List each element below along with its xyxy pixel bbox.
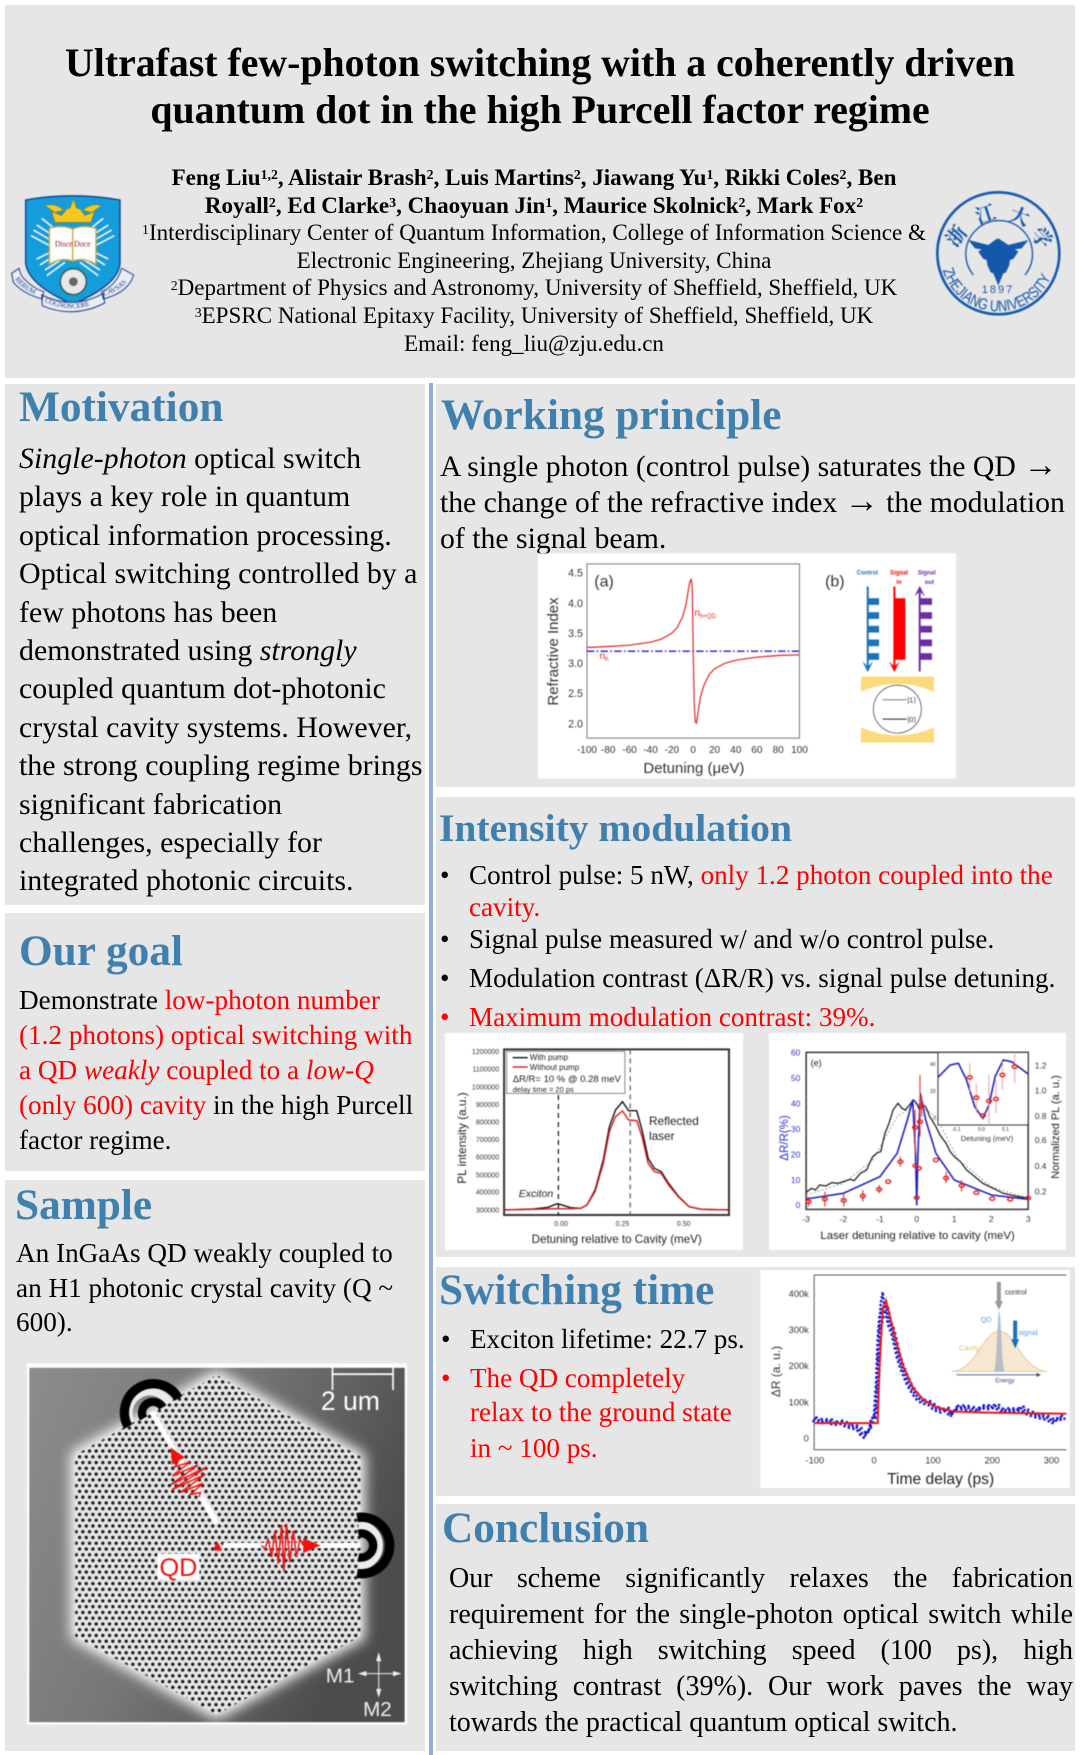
chart: switching time decay: 0: [871, 1455, 877, 1465]
icon: Zhejiang University seal: 1897: [982, 284, 1014, 296]
QD label: QD: [159, 1554, 197, 1582]
goal text: factor regime.: [19, 1125, 171, 1155]
axis labels: [568, 568, 583, 730]
panel: our goal: [5, 913, 425, 1171]
chart: PL intensity vs detuning: Detuning relative to Cavity (meV): [532, 1233, 702, 1246]
tick labels: 0: [804, 1433, 809, 1443]
inset: energy diagram: [952, 1282, 1047, 1384]
scheme: cavity with two-level system: |0⟩: [907, 715, 916, 724]
chart: switching time decay: 300: [1044, 1455, 1059, 1465]
chart: switching time decay: 100: [925, 1455, 941, 1465]
authors and affiliations: 3EPSRC National Epitaxy Facility, University of Sheffield, Sheffield, UK: [195, 302, 873, 328]
motivation text: few photons has been: [19, 596, 277, 629]
y tick labels: 600000: [476, 1155, 499, 1162]
y tick labels: 1100000: [472, 1067, 499, 1074]
conclusion text: [449, 1563, 1073, 1738]
chart: refractive index and scheme: 60: [751, 745, 763, 756]
left axis ticks: 50: [791, 1073, 801, 1083]
inset: energy diagram: control: [1005, 1287, 1027, 1296]
motivation text: significant fabrication: [19, 788, 282, 821]
QD marker: [213, 1542, 222, 1550]
y tick labels: 1000000: [472, 1084, 499, 1091]
chart: modulation contrast vs laser detuning: 0.0: [978, 1127, 985, 1133]
icon: Zhejiang University seal: 大: [1006, 198, 1034, 232]
vertical divider: [429, 383, 433, 1755]
heading: switching time: Switching time: [439, 1266, 714, 1314]
authors and affiliations: Feng Liu1,2, Alistair Brash2, Luis Martins2, Jiawang Yu1, Rikki Coles2, Ben: [172, 164, 896, 190]
chart: modulation contrast vs laser detuning: 20: [930, 1089, 936, 1095]
motivation text: Optical switching controlled by a: [19, 557, 417, 590]
x ticks: 0: [914, 1214, 919, 1224]
inset: energy diagram: signal: [1019, 1328, 1038, 1337]
authors and affiliations: Electronic Engineering, Zhejiang University, China: [297, 247, 771, 273]
motivation text: challenges, especially for: [19, 826, 322, 859]
title: [65, 41, 1015, 132]
x ticks: -2: [840, 1214, 847, 1224]
icon: Zhejiang University seal: 学: [1025, 220, 1061, 254]
switching bullets: relax to the ground state: [470, 1397, 732, 1427]
motivation text: Single-photon optical switch: [19, 442, 361, 475]
sample text: 600).: [16, 1307, 73, 1337]
scheme: signal out arrow: out: [925, 580, 934, 586]
chart: refractive index and scheme: (a): [594, 574, 614, 591]
chart: refractive index and scheme: h: [605, 657, 609, 663]
chart: PL intensity vs detuning: Without pump: [530, 1063, 580, 1072]
chart: refractive index and scheme: 0: [690, 745, 696, 756]
scheme: control arrow: [857, 571, 879, 672]
left axis ticks: [791, 1048, 801, 1210]
sample text: [16, 1238, 393, 1337]
authors and affiliations: [142, 164, 926, 356]
crystal hexagon: [75, 1375, 360, 1715]
heading: conclusion: Conclusion: [442, 1504, 649, 1552]
inset: energy diagram: Energy: [995, 1378, 1014, 1384]
y tick labels: 300000: [476, 1207, 499, 1214]
motivation text: crystal cavity systems. However,: [19, 711, 412, 744]
chart: modulation contrast vs laser detuning: Normalized PL (a. u.): [1050, 1075, 1062, 1179]
chart: switching time decay: ΔR (a. u.): [769, 1346, 783, 1397]
y tick labels: 900000: [476, 1102, 499, 1109]
panel: switching time: •: [441, 1363, 450, 1393]
chart: refractive index and scheme: Detuning (μeV): [643, 760, 744, 777]
goal text: (1.2 photons) optical switching with: [19, 1020, 412, 1050]
heading: working principle: Working principle: [441, 391, 781, 439]
data points: [813, 1292, 1066, 1438]
chart: modulation contrast vs laser detuning: (e): [811, 1058, 822, 1068]
chart: modulation contrast vs laser detuning: -0.1: [952, 1127, 961, 1133]
left axis ticks: 20: [791, 1150, 801, 1160]
waveguides: [152, 1412, 360, 1545]
left axis ticks: 60: [791, 1048, 801, 1058]
authors and affiliations: Royall2, Ed Clarke3, Chaoyuan Jin1, Maurice Skolnick2, Mark Fox2: [205, 192, 863, 218]
switching bullets: [441, 1324, 745, 1463]
chart: PL intensity vs detuning: laser: [649, 1129, 675, 1143]
goal text: Demonstrate low-photon number: [19, 985, 380, 1015]
x tick labels: 0.50: [677, 1221, 691, 1228]
x tick labels: 0.25: [616, 1221, 629, 1228]
inset labels: Detuning (meV): [961, 1134, 1014, 1143]
working principle text: the change of the refractive index → the modulation: [440, 483, 1065, 520]
chart: PL intensity vs detuning: ΔR/R= 10 % @ 0.28 meV: [513, 1074, 621, 1085]
left axis ticks: 10: [791, 1175, 801, 1185]
y tick labels: 800000: [476, 1119, 499, 1126]
annotations: Reflected: [649, 1114, 699, 1128]
switching bullets: Exciton lifetime: 22.7 ps.: [470, 1324, 745, 1354]
panel: switching time: •: [441, 1324, 450, 1354]
heading: sample: Sample: [15, 1181, 152, 1229]
x ticks: 1: [952, 1214, 957, 1224]
axis labels: 4.5: [568, 568, 583, 580]
x ticks: -3: [802, 1214, 810, 1224]
axis labels: 4.0: [568, 598, 583, 610]
chart: modulation contrast vs laser detuning: 0: [933, 1116, 936, 1122]
panel: intensity modulation: •: [440, 924, 450, 954]
grating couplers: [124, 1384, 390, 1574]
chart: refractive index and scheme: -60: [622, 745, 637, 756]
bullet list: Control pulse: 5 nW, only 1.2 photon coupled into the: [469, 860, 1053, 890]
panel: header: [5, 5, 1075, 378]
right axis ticks: 1.0: [1035, 1086, 1047, 1096]
icon: Zhejiang University seal: ZHEJIANG UNIVERSITY: [942, 266, 1050, 312]
right axis ticks: [1035, 1061, 1047, 1197]
icon: Zhejiang University seal: 浙: [937, 218, 973, 252]
chart: refractive index and scheme: -20: [665, 745, 680, 756]
goal text: (only 600) cavity in the high Purcell: [19, 1090, 413, 1120]
left axis ticks: 30: [791, 1124, 801, 1134]
panel: working principle: [436, 384, 1075, 787]
scale bar: 2 um: [321, 1386, 380, 1416]
sample micrograph: [27, 1363, 407, 1725]
panel: intensity modulation: •: [440, 1002, 450, 1032]
motivation text: demonstrated using strongly: [19, 634, 357, 667]
axis labels: 3.5: [568, 628, 583, 640]
motivation text: coupled quantum dot-photonic: [19, 672, 386, 705]
icon: Zhejiang University seal: [935, 190, 1062, 316]
x tick labels: 0.00: [554, 1221, 568, 1228]
plot frame: [814, 1275, 1066, 1450]
left axis ticks: 40: [791, 1098, 801, 1108]
goal text: [19, 985, 413, 1155]
chart: refractive index and scheme: Refractive Index: [545, 597, 562, 706]
fit curve: [815, 1301, 1066, 1423]
chart: refractive index and scheme: (b): [825, 574, 845, 591]
chart: refractive index and scheme: -40: [643, 745, 658, 756]
chart: refractive index and scheme: n: [600, 651, 605, 662]
panel: motivation: [5, 384, 425, 905]
authors and affiliations: 1Interdisciplinary Center of Quantum Information, College of Information Science &: [142, 219, 926, 245]
right axis ticks: 0.8: [1035, 1111, 1047, 1121]
goal text: a QD weakly coupled to a low-Q: [19, 1055, 374, 1085]
icon: University of Sheffield crest: CAVSAS: [102, 279, 126, 296]
right axis ticks: 0.2: [1035, 1187, 1047, 1197]
switching bullets: in ~ 100 ps.: [470, 1433, 598, 1463]
host index line: [587, 649, 799, 653]
tick labels: 100k: [789, 1397, 809, 1407]
axes M1 M2: M1: [326, 1664, 354, 1687]
scheme: cavity with two-level system: [861, 676, 934, 742]
scheme: signal in arrow: in: [896, 580, 902, 586]
icon: red pulse in: [153, 1437, 218, 1507]
title: Ultrafast few-photon switching with a coherently driven: [65, 41, 1015, 85]
panel: sample: [5, 1180, 425, 1751]
axis labels: 2.0: [568, 718, 583, 730]
left axis ticks: 0: [796, 1200, 801, 1210]
chart: modulation contrast vs laser detuning: 0.1: [1002, 1127, 1009, 1133]
heading: intensity modulation: Intensity modulation: [439, 806, 792, 850]
chart: refractive index and scheme: 40: [730, 745, 742, 756]
motivation text: optical information processing.: [19, 519, 392, 552]
scheme: signal out arrow: Signal: [918, 571, 936, 577]
scheme: cavity with two-level system: |1⟩: [907, 695, 916, 704]
chart: refractive index and scheme: [538, 552, 956, 779]
right axis ticks: 1.2: [1035, 1061, 1047, 1071]
sample text: an H1 photonic crystal cavity (Q ~: [16, 1273, 393, 1303]
scheme: signal in arrow: Signal: [890, 571, 908, 577]
icon: University of Sheffield crest: Disce: [55, 239, 73, 248]
chart: switching time decay: -100: [806, 1455, 824, 1465]
chart: refractive index and scheme: n: [695, 608, 700, 619]
chart: refractive index and scheme: 80: [773, 745, 784, 756]
y tick labels: 1200000: [472, 1049, 499, 1056]
inset: [938, 1052, 1028, 1125]
tick labels: 400k: [789, 1289, 809, 1299]
scheme: signal in arrow: [889, 571, 908, 672]
axes M1 M2: [326, 1652, 401, 1721]
icon: University of Sheffield crest: RERUM: [14, 276, 36, 295]
panel: intensity modulation: [436, 797, 1075, 1257]
bullet list: cavity.: [469, 892, 540, 922]
panel: intensity modulation: •: [440, 860, 450, 890]
chart: modulation contrast vs laser detuning: [769, 1033, 1066, 1250]
chart: refractive index and scheme: -100: [577, 745, 597, 756]
axes M1 M2: M2: [363, 1698, 392, 1721]
motivation text: [19, 442, 422, 897]
bullet list: Signal pulse measured w/ and w/o control pulse.: [469, 924, 994, 954]
panel: intensity modulation: •: [440, 963, 450, 993]
plot frame: [587, 564, 799, 738]
axis titles: ΔR/R(%): [779, 1115, 791, 1161]
icon: University of Sheffield crest: COGNOSCERE: [44, 298, 90, 309]
chart: switching time decay: 200: [984, 1455, 1000, 1465]
heading: motivation: Motivation: [19, 383, 223, 431]
switching bullets: The QD completely: [470, 1363, 685, 1393]
inset: energy diagram: QD: [981, 1315, 992, 1324]
icon: University of Sheffield crest: Doce: [74, 239, 91, 248]
chart: PL intensity vs detuning: Exciton: [519, 1188, 553, 1200]
chart: switching time decay: Time delay (ps): [887, 1471, 994, 1488]
heading: our goal: Our goal: [19, 927, 183, 975]
scheme: signal out arrow: [914, 571, 936, 671]
chart: refractive index and scheme: h+QD: [700, 614, 717, 620]
tick labels: [789, 1289, 809, 1443]
chart: PL intensity vs detuning: With pump: [530, 1053, 569, 1062]
y tick labels: 400000: [476, 1190, 499, 1197]
scale bar: [321, 1367, 393, 1416]
motivation text: plays a key role in quantum: [19, 480, 350, 513]
panel: switching time: [436, 1267, 1075, 1496]
x ticks: [802, 1214, 1031, 1224]
authors and affiliations: 2Department of Physics and Astronomy, University of Sheffield, Sheffield, UK: [171, 274, 897, 300]
conclusion text: Our scheme significantly relaxes the fabrication: [449, 1563, 1073, 1594]
bullet list: [440, 860, 1055, 1032]
icon: University of Sheffield crest: [10, 194, 135, 314]
chart: PL intensity vs detuning: [445, 1033, 743, 1250]
y tick labels: 500000: [476, 1172, 499, 1179]
inset: energy diagram: Cavity: [959, 1344, 980, 1353]
chart: PL intensity vs detuning: delay time = 20 ps: [513, 1085, 574, 1094]
axis titles: PL intensity (a.u.): [455, 1092, 469, 1184]
working principle text: of the signal beam.: [440, 522, 666, 555]
conclusion text: switching contrast (39%). Our work paves the way: [449, 1671, 1073, 1702]
sample text: An InGaAs QD weakly coupled to: [16, 1238, 393, 1268]
x ticks: 3: [1026, 1214, 1031, 1224]
scheme: control arrow: Control: [857, 571, 878, 577]
working principle text: A single photon (control pulse) saturates the QD →: [440, 447, 1058, 484]
right axis ticks: 0.6: [1035, 1135, 1047, 1145]
panel: conclusion: [436, 1504, 1075, 1751]
authors and affiliations: Email: feng_liu@zju.edu.cn: [404, 330, 664, 356]
chart: refractive index and scheme: 100: [791, 745, 808, 756]
x tick labels: [554, 1221, 691, 1228]
axis labels: 3.0: [568, 658, 583, 670]
x ticks: 2: [989, 1214, 994, 1224]
conclusion text: towards the practical quantum optical switch.: [449, 1707, 958, 1738]
chart: modulation contrast vs laser detuning: Laser detuning relative to cavity (meV): [820, 1230, 1015, 1242]
chart: modulation contrast vs laser detuning: 40: [930, 1062, 936, 1068]
right axis ticks: 0.4: [1035, 1161, 1047, 1171]
chart: switching time decay: [760, 1270, 1070, 1488]
title: quantum dot in the high Purcell factor regime: [150, 88, 930, 132]
refractive index curve: [587, 579, 799, 723]
y tick labels: 700000: [476, 1137, 499, 1144]
chart: refractive index and scheme: 20: [709, 745, 721, 756]
axis labels: 2.5: [568, 688, 583, 700]
chart: refractive index and scheme: -80: [601, 745, 616, 756]
motivation text: integrated photonic circuits.: [19, 864, 354, 897]
x ticks: -1: [876, 1214, 884, 1224]
tick labels: 300k: [789, 1325, 809, 1335]
motivation text: the strong coupling regime brings: [19, 749, 422, 782]
y tick labels: [472, 1049, 499, 1214]
icon: red pulse out: [262, 1524, 320, 1571]
bullet list: Maximum modulation contrast: 39%.: [469, 1002, 875, 1032]
working principle text: [440, 447, 1065, 555]
conclusion text: requirement for the single-photon optical switch while: [449, 1599, 1073, 1630]
bullet list: Modulation contrast (ΔR/R) vs. signal pulse detuning.: [469, 963, 1055, 993]
conclusion text: achieving high switching speed (100 ps), high: [449, 1635, 1073, 1666]
icon: Zhejiang University seal: 江: [971, 196, 999, 230]
tick labels: 200k: [789, 1361, 809, 1371]
